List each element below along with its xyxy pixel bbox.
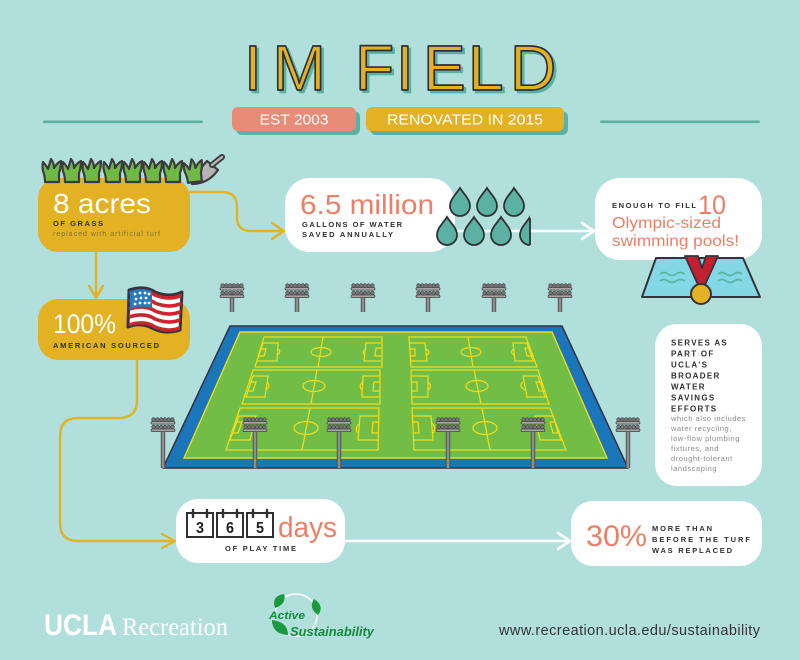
panel: water savings efforts: low-flow plumbing [671,434,740,443]
field: right bottom [412,408,566,450]
arrow: grass to sourced [89,250,103,298]
panel: water savings efforts: WATER [671,382,706,392]
panel: swimming pools [595,178,762,260]
panel: water savings efforts [655,324,762,486]
field: right middle [411,370,549,404]
panel: swimming pools: Olympic-sized [612,215,721,232]
logo: UCLA Recreation [44,609,228,642]
logo: Active Sustainability: Sustainability [290,625,375,639]
panel: water savings efforts: SERVES AS [671,338,728,348]
panel: 8 acres: replaced with artificial turf [53,231,160,238]
pill: established: EST 2003 [260,112,328,128]
panel: water saved: 6.5 million [300,189,434,220]
logo: Active Sustainability: Active [268,610,305,622]
panel: water savings efforts: fixtures, and [671,444,719,453]
icon: trowel with grass [183,157,222,184]
panel: water saved: SAVED ANNUALLY [302,230,393,239]
field: left middle [242,370,380,404]
pill: renovated [366,107,568,135]
panel: water saved [285,178,455,252]
panel: 8 acres [38,178,190,252]
panel: 365 days [176,499,345,563]
days label: days [278,512,337,544]
panel: water savings efforts: which also includes [670,414,746,423]
panel: 30% more: 30% [586,520,647,553]
arrow: sourced to play time [60,360,175,548]
website url: www.recreation.ucla.edu/sustainability [498,623,761,639]
panel: swimming pools: swimming pools! [612,233,739,250]
panel: 30% more [571,501,762,566]
panel: 100% american sourced: AMERICAN SOURCED [53,341,160,350]
stadium lights: back row [220,283,572,312]
icon: water drops [437,188,540,245]
panel: water savings efforts: water recycling, [670,424,732,433]
icon: calendar 3: 3 [196,520,204,537]
panel: swimming pools: 10 [698,190,726,220]
panel: 100% american sourced [38,299,190,360]
stadium lights: front row [150,417,640,468]
icon: pool with medal [642,256,760,304]
icon: calendar 6 [217,510,243,537]
pill: established [232,107,360,135]
panel: water savings efforts: drought-tolerant [671,454,733,463]
field: right top [409,337,537,367]
panel: 100% american sourced: 100% [53,309,116,339]
soccer field complex [163,326,628,468]
icon: calendar 5: 5 [256,520,264,537]
logo: Active Sustainability [268,594,375,639]
panel: water savings efforts: BROADER [671,372,721,380]
panel: 30% more: BEFORE THE TURF [652,535,750,544]
logo: UCLA Recreation: UCLA [44,609,117,642]
panel: 30% more: WAS REPLACED [652,546,733,555]
panel: 8 acres: OF GRASS [53,219,103,228]
right divider [600,120,760,123]
arrow: water to pools [450,223,594,239]
icon: grass row [42,159,182,182]
panel: water savings efforts: EFFORTS [671,404,717,414]
field: left bottom [226,408,379,450]
field: left top [255,337,382,367]
title: IMFIELD [246,34,559,106]
pill: renovated: RENOVATED IN 2015 [387,112,543,128]
icon: calendar 5 [247,510,273,537]
arrow: grass to water [190,192,284,239]
title: IMFIELD [244,32,556,104]
panel: water savings efforts: PART OF [671,350,715,358]
arrow: play time to more play [344,533,570,549]
panel: water savings efforts: SAVINGS [671,394,716,402]
logo: UCLA Recreation: Recreation [122,614,228,641]
play time label: OF PLAY TIME [225,544,296,553]
panel: swimming pools: ENOUGH TO FILL [612,201,696,210]
icon: calendar 6: 6 [226,520,234,537]
panel: water saved: GALLONS OF WATER [302,220,403,229]
left divider [43,120,203,123]
panel: water savings efforts: UCLA'S [671,360,708,370]
panel: 8 acres: 8 acres [53,188,151,219]
panel: 30% more: MORE THAN [652,524,712,533]
icon: calendar 3 [187,510,213,537]
icon: american flag [128,288,182,332]
panel: water savings efforts: landscaping [671,464,717,473]
